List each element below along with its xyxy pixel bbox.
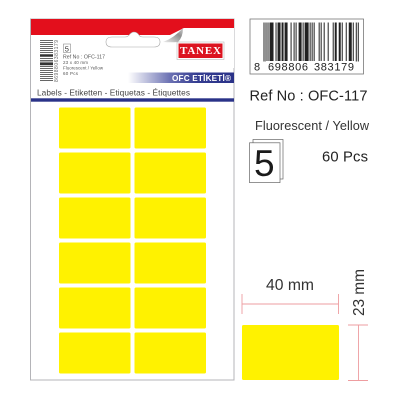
sample yellow label	[242, 325, 339, 380]
package product details: Fluorescent / Yellow	[63, 66, 104, 70]
Tanex logo	[177, 42, 224, 60]
logo panel with page curl	[162, 28, 234, 68]
piece count: 60 Pcs	[322, 150, 368, 166]
barcode	[250, 19, 364, 74]
icon: pack count 5: 5	[254, 143, 275, 184]
red header band	[31, 19, 234, 35]
blue product band: OFC ETİKETİ®	[172, 73, 231, 83]
colour name: Fluorescent / Yellow	[255, 119, 370, 133]
package product details: 60 Pcs	[63, 71, 79, 76]
package pack count icon: 5	[65, 44, 69, 54]
height dimension: 23 mm: 23 mm	[351, 269, 368, 316]
package product details	[63, 54, 105, 76]
barcode: 8	[254, 62, 260, 74]
barcode: 698806	[268, 62, 308, 74]
languages heading: Labels - Etiketten - Etiquetas - Étiquettes	[37, 88, 190, 98]
blue product band	[128, 72, 234, 83]
barcode: 383179	[314, 62, 354, 74]
icon: pack count 5	[250, 140, 283, 184]
package product details: 23 x 40 mm	[63, 60, 88, 65]
hang hole	[106, 32, 160, 47]
height dimension: 23 mm	[348, 269, 368, 381]
package product details: Ref No : OFC-117	[63, 54, 105, 60]
yellow label sheet	[59, 108, 206, 374]
package mini barcode	[40, 40, 60, 82]
width dimension: 40 mm	[242, 277, 338, 314]
package pack count icon	[64, 44, 70, 54]
reference number: Ref No : OFC-117	[250, 88, 368, 104]
panel: product package card	[30, 19, 234, 380]
package mini barcode: 8698806383179	[54, 40, 60, 82]
width dimension: 40 mm: 40 mm	[266, 277, 314, 294]
blue divider	[31, 98, 234, 102]
Tanex logo: TANEX	[180, 45, 221, 57]
